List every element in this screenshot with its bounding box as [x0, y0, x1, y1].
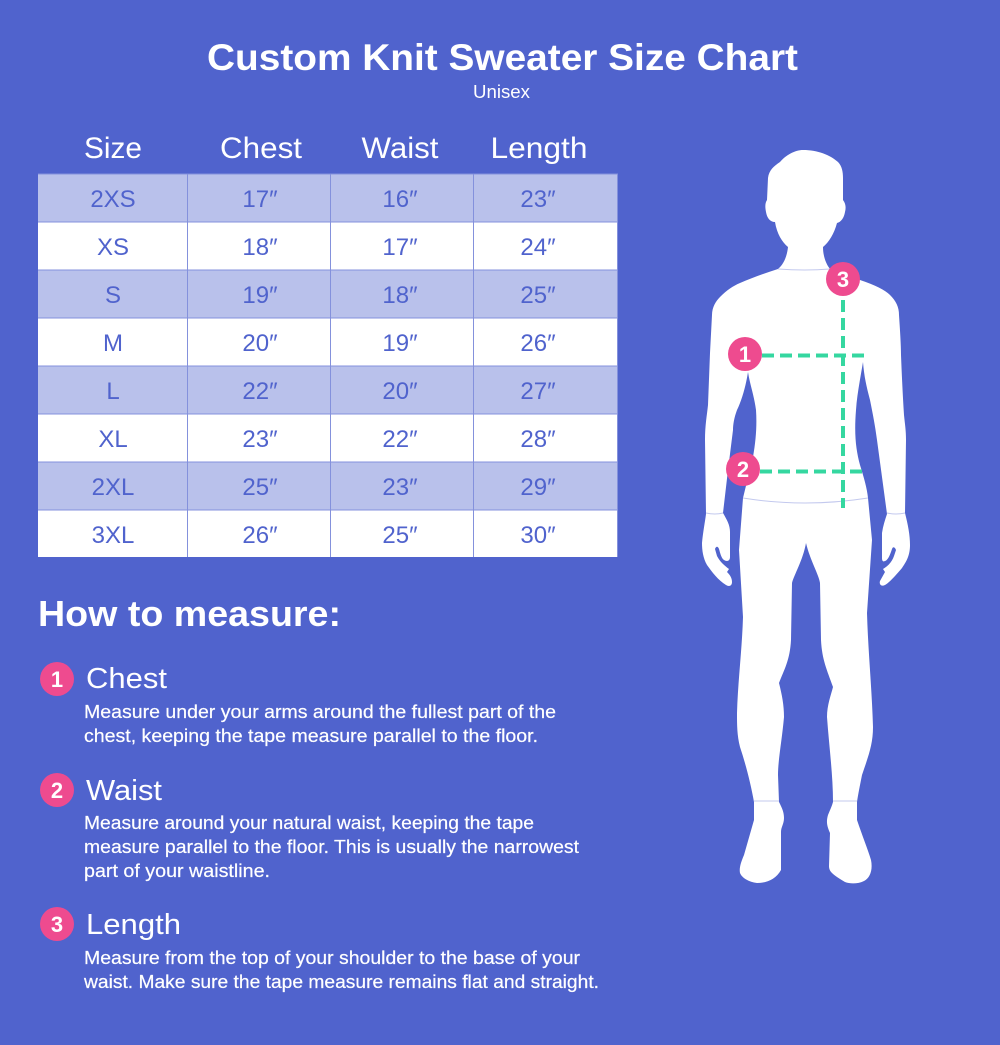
row: L: 22″ — [242, 378, 278, 405]
table header: Waist — [362, 132, 439, 165]
marker 2 — [726, 452, 760, 486]
chest description: chest, keeping the tape measure parallel to the floor. — [84, 726, 538, 746]
chest description: Measure under your arms around the fullest part of the — [84, 702, 556, 722]
row: S: 19″ — [242, 282, 278, 309]
row: M: 19″ — [382, 330, 418, 357]
chest heading: Chest — [86, 663, 167, 695]
row: 3XL — [92, 522, 556, 549]
row: 2XL: 2XL — [92, 474, 134, 501]
length heading: Length — [86, 909, 181, 941]
subtitle: Unisex — [473, 82, 530, 102]
table row backgrounds — [38, 174, 618, 557]
garment seams — [706, 269, 905, 801]
row: XL — [98, 426, 556, 453]
badge 1: 1 — [51, 667, 63, 692]
badge 1 — [40, 662, 74, 696]
row: S: S — [105, 282, 121, 309]
row: 3XL: 26″ — [242, 522, 278, 549]
waist description: measure parallel to the floor. This is usually the narrowest — [84, 837, 579, 857]
row: M: 20″ — [242, 330, 278, 357]
row: 2XS: 23″ — [520, 186, 556, 213]
length description: Measure from the top of your shoulder to the base of your — [84, 948, 580, 968]
title: Custom Knit Sweater Size Chart — [207, 37, 798, 78]
marker 1: 1 — [739, 342, 751, 367]
waist description: Measure around your natural waist, keeping the tape — [84, 813, 534, 833]
row: M — [103, 330, 556, 357]
row: 2XS: 16″ — [382, 186, 418, 213]
row: S: 18″ — [382, 282, 418, 309]
row: L — [106, 378, 556, 405]
length measure line — [841, 300, 845, 508]
row: XL: 28″ — [520, 426, 556, 453]
length description — [83, 948, 599, 992]
marker 2: 2 — [737, 457, 749, 482]
row: 2XS: 2XS — [90, 186, 136, 213]
row: XL: XL — [98, 426, 128, 453]
row: XL: 22″ — [382, 426, 418, 453]
row: S — [105, 282, 556, 309]
row: XS: 24″ — [520, 234, 556, 261]
section: waist — [40, 773, 579, 881]
size table — [38, 132, 618, 557]
badge 3 — [40, 907, 74, 941]
row: XS: XS — [97, 234, 129, 261]
row: 3XL: 3XL — [92, 522, 134, 549]
row: L: L — [106, 378, 120, 405]
badge 2 — [40, 773, 74, 807]
row: M: 26″ — [520, 330, 556, 357]
row: XS: 17″ — [382, 234, 418, 261]
row: M: M — [103, 330, 123, 357]
row: 2XS: 17″ — [242, 186, 278, 213]
chest measure line — [762, 354, 864, 358]
body figure diagram — [702, 150, 910, 883]
row: XL: 23″ — [242, 426, 278, 453]
badge 2: 2 — [51, 778, 63, 803]
length description: waist. Make sure the tape measure remains flat and straight. — [83, 972, 599, 992]
row: 2XS — [90, 186, 556, 213]
body silhouette — [702, 150, 910, 883]
row: 2XL: 25″ — [242, 474, 278, 501]
table header: Size — [84, 132, 142, 165]
waist measure line — [760, 470, 868, 474]
marker 3: 3 — [837, 267, 849, 292]
row: S: 25″ — [520, 282, 556, 309]
table header: Length — [490, 132, 588, 165]
badge 3: 3 — [51, 912, 63, 937]
row: XS — [97, 234, 556, 261]
row: 3XL: 30″ — [520, 522, 556, 549]
waist heading: Waist — [86, 775, 162, 807]
waist description: part of your waistline. — [84, 861, 270, 881]
row: L: 27″ — [520, 378, 556, 405]
table header — [84, 132, 588, 165]
marker 1 — [728, 337, 762, 371]
row: 2XL: 29″ — [520, 474, 556, 501]
marker 3 — [826, 262, 860, 296]
table header: Chest — [220, 132, 303, 165]
row: 2XL — [92, 474, 556, 501]
row: L: 20″ — [382, 378, 418, 405]
how to measure heading: How to measure: — [38, 593, 341, 634]
row: 2XL: 23″ — [382, 474, 418, 501]
section: chest — [40, 662, 556, 746]
row: 3XL: 25″ — [382, 522, 418, 549]
waist description — [84, 813, 579, 881]
section: length — [40, 907, 599, 992]
chest description — [84, 702, 556, 746]
row: XS: 18″ — [242, 234, 278, 261]
